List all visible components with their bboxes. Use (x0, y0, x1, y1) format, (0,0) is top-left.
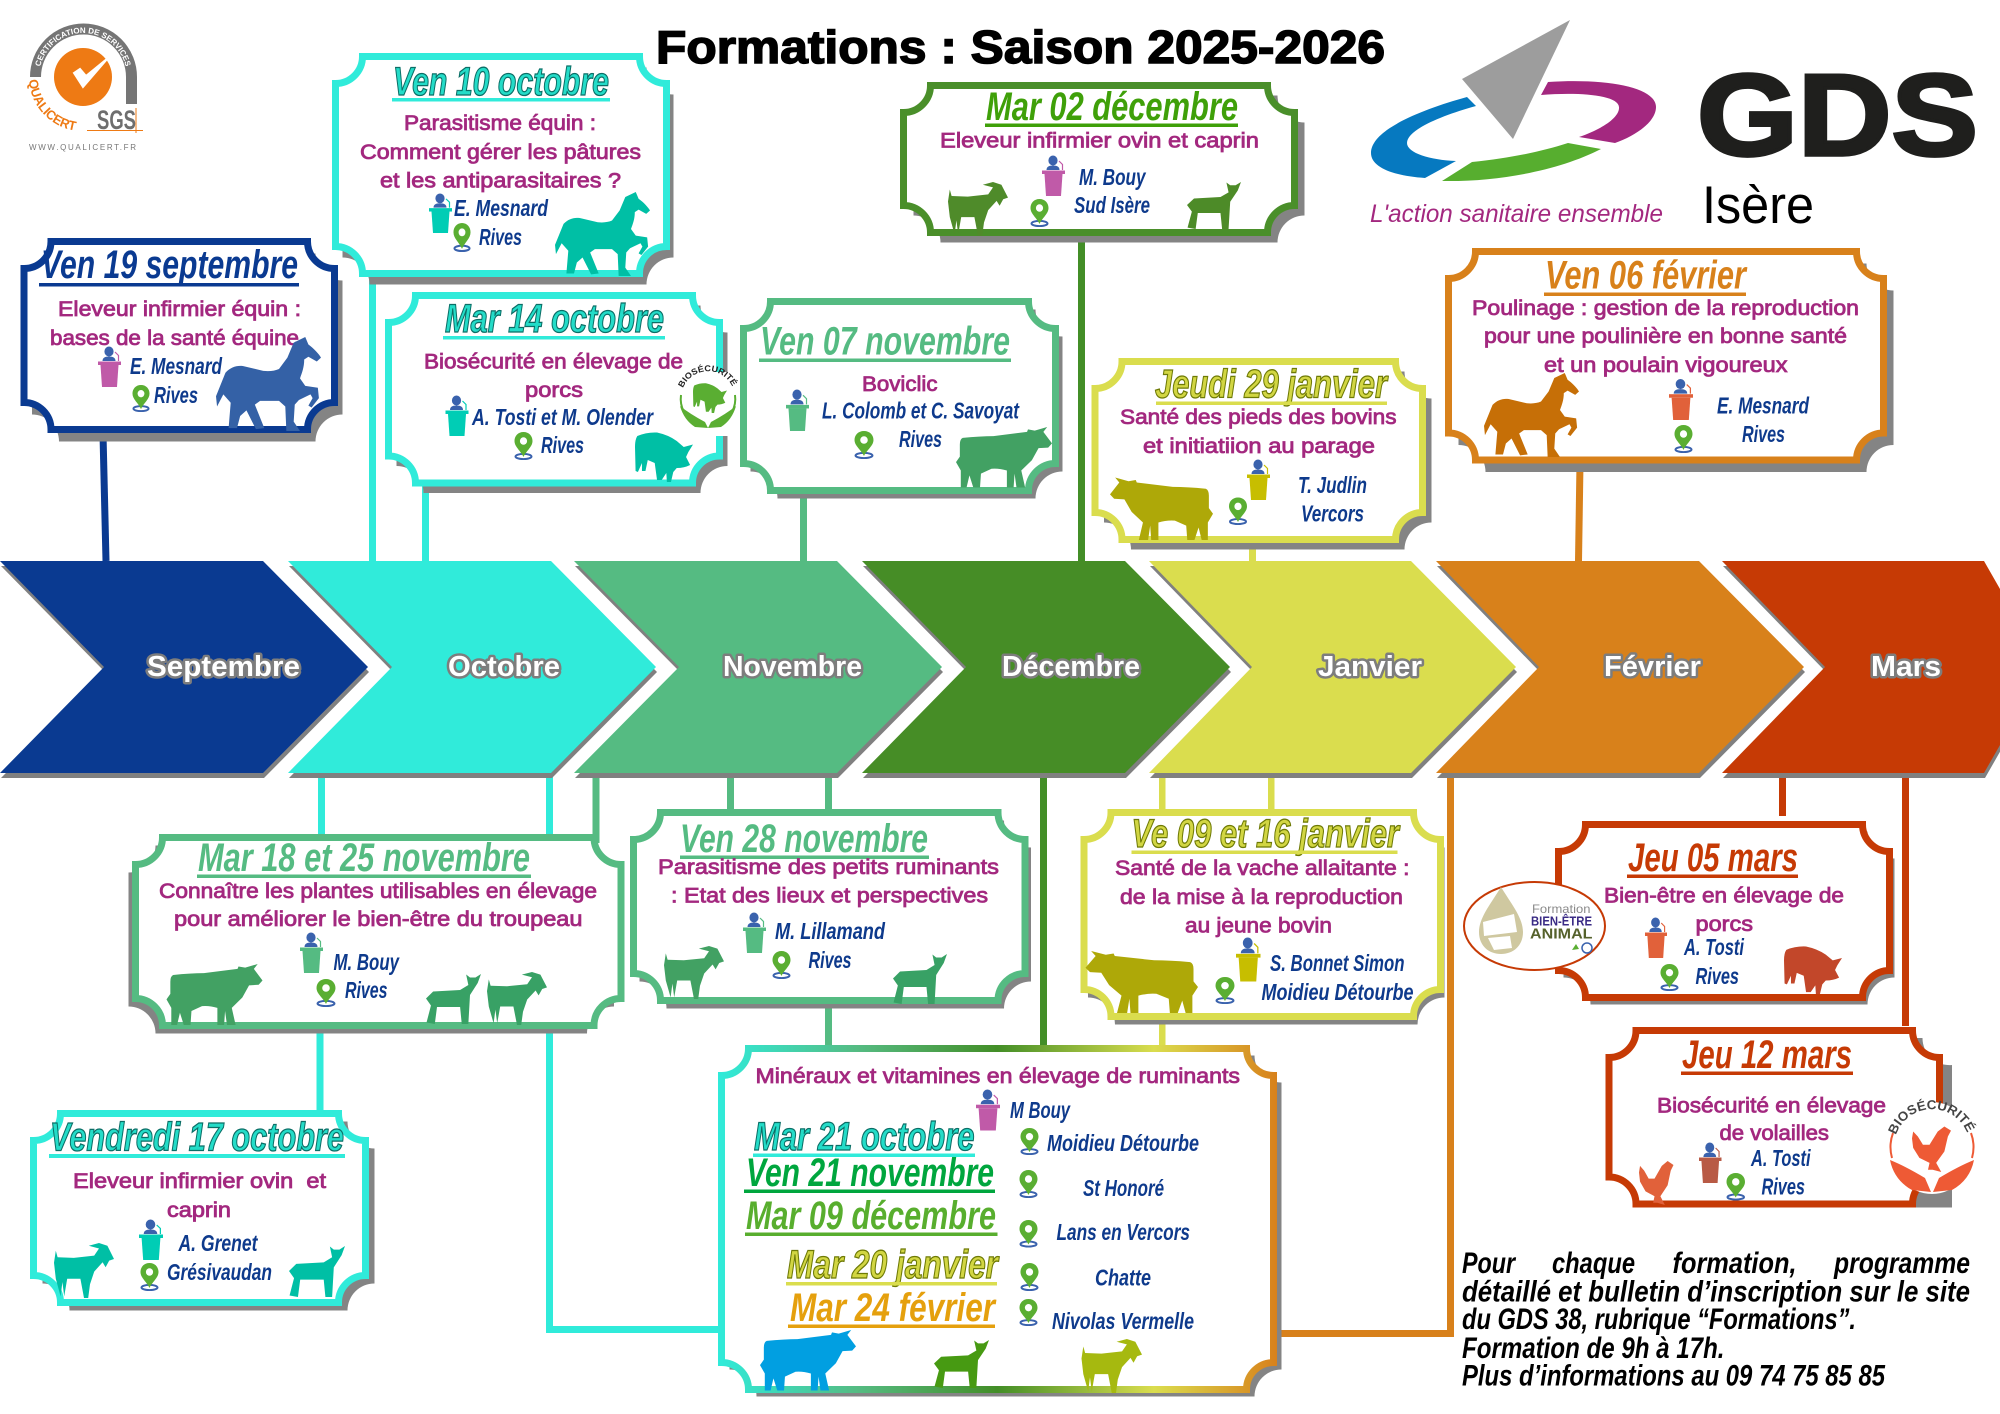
locations: Chatte (1095, 1264, 1151, 1290)
location name: Rives (541, 432, 584, 458)
icon: location (317, 979, 335, 1006)
description (159, 880, 597, 931)
chevron: Décembre (862, 561, 1231, 778)
logo mark (1371, 20, 1656, 181)
speaker name: A. Tosti (1750, 1145, 1811, 1171)
locations (1020, 1128, 1199, 1334)
speaker name: S. Bonnet Simon (1270, 950, 1404, 976)
chevron: Janvier (1149, 561, 1517, 778)
description: Santé de la vache allaitante : (1115, 857, 1410, 880)
speaker name: M. Lillamand (775, 918, 886, 944)
icon: location (772, 951, 790, 978)
panel: Ve 09 et 16 janvier (1084, 812, 1444, 1024)
description: Parasitisme équin : (404, 112, 596, 135)
description: et initiatiion au parage (1143, 435, 1375, 458)
badge: formation bien-être animal: Formation (1532, 902, 1590, 916)
icon: location (855, 431, 873, 458)
icon: location (1030, 199, 1048, 226)
heading: Ve 09 et 16 janvier (1132, 812, 1401, 856)
icon: location (1660, 964, 1678, 990)
icon: goat (54, 1243, 114, 1298)
heading: Ven 07 novembre (760, 320, 1010, 364)
heading: Ven 06 février (1545, 254, 1748, 298)
icon: speaker (1236, 938, 1260, 982)
speaker name: E. Mesnard (454, 195, 549, 221)
speaker name: T. Judlin (1298, 472, 1367, 498)
logo: GDS Isère (1370, 20, 1978, 235)
icon: speaker (446, 396, 468, 436)
location name: Vercors (1301, 500, 1364, 526)
description: Eleveur infirmier ovin et caprin (940, 130, 1259, 152)
description: caprin (167, 1199, 231, 1222)
icon: cow (956, 427, 1052, 488)
panel: Jeu 12 mars (1606, 1027, 1976, 1208)
badge: formation bien-être animal (1464, 882, 1605, 970)
heading: Mar 02 décembre (986, 85, 1238, 129)
dates (744, 1115, 1000, 1330)
dates: Mar 21 octobre (754, 1115, 974, 1159)
description (50, 298, 301, 350)
icon: goat (948, 182, 1008, 236)
Isère wordmark: Isère (1702, 176, 1814, 235)
text block: informations pratiques (1462, 1247, 1970, 1392)
dates: Mar 09 décembre (746, 1194, 996, 1238)
locations: St Honoré (1083, 1175, 1164, 1201)
panel: Jeu 05 mars (1464, 824, 1894, 1004)
chevron: Octobre: Octobre (448, 651, 560, 683)
dates: Mar 24 février (790, 1286, 997, 1330)
description (360, 112, 641, 192)
icon: speaker (429, 193, 452, 233)
description: pour une poulinière en bonne santé (1484, 325, 1847, 348)
location name: Rives (154, 382, 198, 408)
text block: informations pratiques: Plus d’informations au 09 74 75 85 85 (1462, 1360, 1886, 1392)
heading: Jeudi 29 janvier (1155, 362, 1389, 406)
chevron: Janvier: Janvier (1318, 651, 1422, 683)
description: Santé des pieds des bovins (1120, 406, 1396, 429)
chevron: Décembre: Décembre (1002, 651, 1140, 683)
connectors above the timeline (103, 236, 1580, 561)
panel: Ven 28 novembre (634, 812, 1031, 1008)
locations: Nivolas Vermelle (1052, 1308, 1194, 1334)
logo: Qualicert SGS: QUALICERT (27, 80, 77, 130)
chevron: Novembre (574, 561, 943, 778)
description: : Etat des lieux et perspectives (671, 884, 988, 908)
description: Bien-être en élevage de (1604, 884, 1844, 908)
text block: informations pratiques: du GDS 38, rubrique “Formations”. (1462, 1303, 1856, 1336)
badge: formation bien-être animal: ANIMAL (1530, 926, 1592, 942)
location name: Moidieu Détourbe (1262, 979, 1414, 1005)
speaker name: M Bouy (1010, 1097, 1071, 1123)
location name: Rives (808, 947, 852, 973)
description: Biosécurité en élevage (1657, 1094, 1886, 1118)
panel: Ven 07 novembre (744, 302, 1062, 498)
badge: biosécurité porcs: BIOSÉCURITÉ (678, 364, 738, 388)
badge: formation bien-être animal: BIEN-ÊTRE (1531, 914, 1592, 928)
heading: Ven 10 octobre (393, 60, 609, 104)
icon: kid goat (893, 954, 947, 1004)
icon: speaker (98, 346, 121, 387)
location name: Rives (1742, 421, 1785, 447)
heading: Mar 14 octobre (445, 297, 664, 341)
description: porcs (1696, 913, 1753, 936)
speaker name: E. Mesnard (130, 353, 223, 379)
description: et un poulain vigoureux (1544, 354, 1788, 377)
locations: Lans en Vercors (1056, 1219, 1190, 1245)
locations: Moidieu Détourbe (1047, 1130, 1199, 1156)
speaker name: M. Bouy (1079, 164, 1146, 190)
chevron: Novembre: Novembre (723, 651, 862, 683)
icon: horse (1484, 373, 1579, 457)
icon: cow (760, 1330, 856, 1390)
icon: cow (1110, 478, 1213, 540)
description: et les antiparasitaires ? (380, 170, 621, 192)
description: pour améliorer le bien-être du troupeau (174, 908, 582, 931)
description (658, 856, 999, 908)
heading: Ven 19 septembre (41, 243, 298, 287)
heading: Mar 18 et 25 novembre (198, 836, 530, 880)
speaker name: E. Mesnard (1717, 392, 1810, 418)
location name: Sud Isère (1074, 192, 1150, 218)
text block: informations pratiques: programme (1833, 1247, 1970, 1280)
description: Biosécurité en élevage de (424, 350, 683, 374)
slogan: L'action sanitaire ensemble (1370, 200, 1663, 228)
location name: Rives (479, 224, 522, 250)
heading: Jeu 12 mars (1682, 1033, 1852, 1077)
title: Formations : Saison 2025-2026 (656, 21, 1385, 73)
text block: informations pratiques: Formation de 9h à 17h. (1462, 1332, 1724, 1365)
text block: informations pratiques: chaque (1552, 1247, 1635, 1280)
panel: Mar 18 et 25 novembre (128, 836, 621, 1034)
icon: speaker (1669, 379, 1693, 420)
panel: Minéraux et vitamines (722, 1048, 1282, 1396)
panel: Jeudi 29 janvier (1095, 362, 1432, 550)
heading: Jeu 05 mars (1628, 836, 1798, 880)
badge: biosécurité volailles: BIOSÉCURITÉ (1888, 1098, 1976, 1134)
panel: Mar 14 octobre (385, 292, 738, 493)
icon: speaker (1042, 156, 1065, 196)
speaker name: A. Grenet (178, 1230, 259, 1256)
icon: location (1727, 1173, 1745, 1200)
description: Minéraux et vitamines en élevage de ruminants (756, 1065, 1240, 1088)
icon: cow (166, 964, 262, 1025)
connectors below the timeline (316, 773, 1909, 1334)
speaker name: M. Bouy (334, 949, 400, 975)
icon: location (132, 385, 150, 411)
panel: Ven 19 septembre (24, 242, 342, 442)
panel: Ven 06 février (1448, 252, 1894, 472)
icon: location (140, 1263, 158, 1290)
badge: biosécurité volailles (1888, 1098, 1976, 1194)
location name: Rives (1696, 963, 1739, 989)
icon: horse (555, 192, 650, 276)
icon: location (453, 223, 471, 251)
description: Eleveur infirmier équin : (58, 298, 301, 321)
icon: speaker (1247, 460, 1270, 500)
icon: speaker (743, 912, 766, 953)
icon: kid goat (289, 1246, 345, 1297)
chevron: Mars: Mars (1871, 651, 1941, 683)
heading: Ven 28 novembre (680, 817, 928, 861)
location name: Rives (899, 426, 942, 452)
icon: location (1229, 498, 1247, 524)
description: Boviclic (862, 373, 938, 396)
description: au jeune bovin (1185, 914, 1332, 938)
icon: speaker (1645, 918, 1667, 958)
description: de la mise à la reproduction (1120, 886, 1403, 909)
location name: Rives (345, 977, 388, 1003)
chevron: Octobre (288, 561, 657, 778)
location name: Grésivaudan (167, 1259, 272, 1285)
icon: location (1674, 425, 1692, 452)
chevron: Février: Février (1604, 651, 1701, 683)
dates: Mar 20 janvier (787, 1243, 1000, 1287)
icon: speaker (300, 932, 323, 973)
description: Parasitisme des petits ruminants (658, 856, 999, 879)
logo: Qualicert SGS (27, 24, 143, 152)
description: Connaître les plantes utilisables en élevage (159, 880, 597, 903)
icon: location (514, 432, 532, 459)
description (424, 350, 683, 402)
chevron: Septembre: Septembre (147, 651, 300, 683)
panel: Ven 10 octobre (336, 56, 674, 284)
chevron: Mars (1722, 561, 2000, 778)
icon: speaker (139, 1220, 163, 1260)
heading: Vendredi 17 octobre (50, 1116, 344, 1160)
GDS wordmark: GDS (1697, 50, 1978, 180)
chevron: Février (1436, 561, 1805, 778)
icon: goat (487, 972, 547, 1025)
description: de volailles (1720, 1122, 1829, 1145)
text block: informations pratiques: Pour (1462, 1247, 1517, 1280)
icon: goat (1082, 1339, 1142, 1393)
description (1115, 857, 1410, 938)
description: bases de la santé équine (50, 327, 299, 350)
speaker name: L. Colomb et C. Savoyat (822, 398, 1020, 424)
icon: kid goat (934, 1340, 989, 1388)
icon: goat (664, 946, 724, 999)
panel: Mar 02 décembre (904, 85, 1304, 242)
icon: kid goat (426, 974, 481, 1024)
icon: speaker (786, 390, 809, 431)
location name: Rives (1762, 1174, 1805, 1200)
logo: Qualicert SGS: CERTIFICATION DE SERVICES (36, 28, 131, 66)
description: Comment gérer les pâtures (360, 141, 641, 164)
icon: speaker (976, 1090, 1000, 1130)
dates: Ven 21 novembre (746, 1151, 994, 1195)
chevron: Septembre (0, 561, 369, 778)
panel: Vendredi 17 octobre (34, 1114, 374, 1310)
description (1657, 1094, 1886, 1145)
icon: location (1216, 977, 1234, 1003)
description (1604, 884, 1844, 936)
description (1472, 297, 1859, 377)
speaker name: A. Tosti et M. Olender (471, 404, 654, 430)
description: Poulinage : gestion de la reproduction (1472, 297, 1859, 320)
icon: pig (635, 432, 693, 482)
icon: cow (1086, 951, 1198, 1013)
icon: speaker (1699, 1142, 1722, 1183)
description: porcs (525, 379, 583, 402)
speaker name: A. Tosti (1683, 934, 1744, 960)
description (1120, 406, 1396, 458)
badge: biosécurité porcs (678, 364, 738, 436)
icon: kid goat (1187, 182, 1241, 229)
logo: Qualicert SGS: SGS (97, 105, 136, 135)
icon: pig (1784, 946, 1842, 994)
description: Eleveur infirmier ovin et (73, 1170, 326, 1193)
description (73, 1170, 326, 1222)
icon: horse (216, 337, 321, 431)
text block: informations pratiques: formation, (1672, 1247, 1796, 1280)
timeline: months (0, 561, 2000, 778)
icon: hen (1639, 1161, 1674, 1205)
logo: Qualicert SGS: WWW.QUALICERT.FR (29, 143, 136, 152)
